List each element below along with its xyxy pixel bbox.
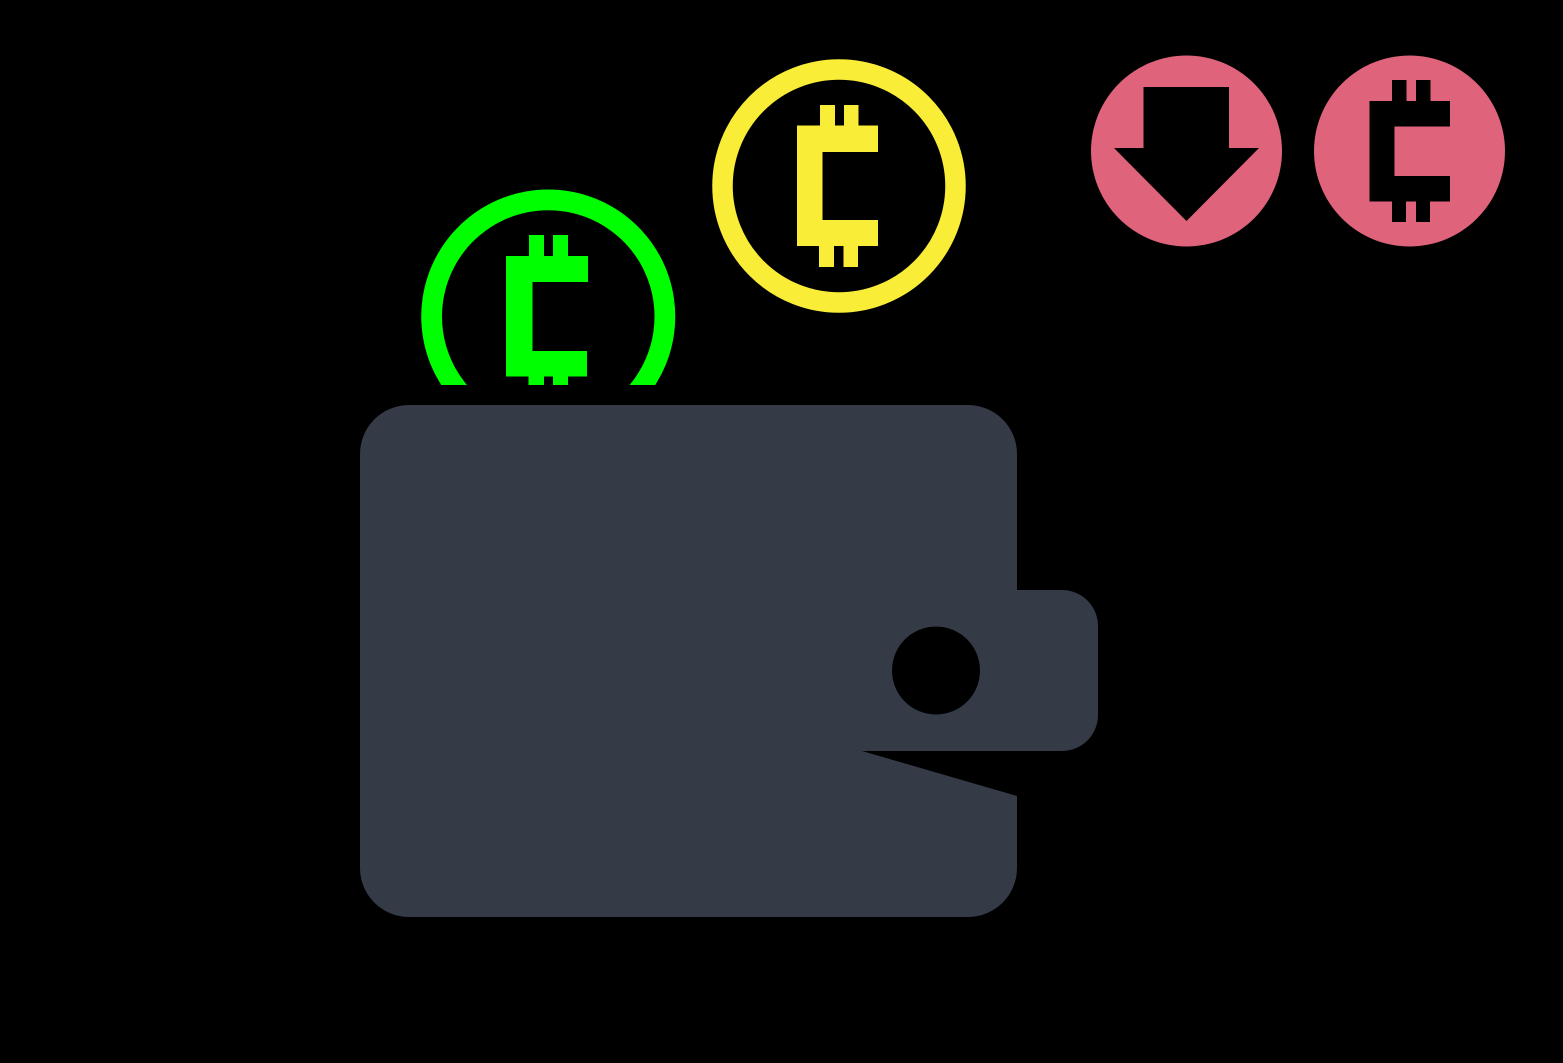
icon: red circle with down arrow: [1091, 56, 1282, 246]
icon: wallet clasp button: [892, 626, 980, 714]
icon: red circle with bitcoin: [1314, 56, 1505, 246]
icon: yellow bitcoin coin: [722, 70, 956, 302]
icon: green bitcoin coin entering wallet: [421, 190, 675, 385]
icon: wallet body: [360, 405, 1098, 917]
